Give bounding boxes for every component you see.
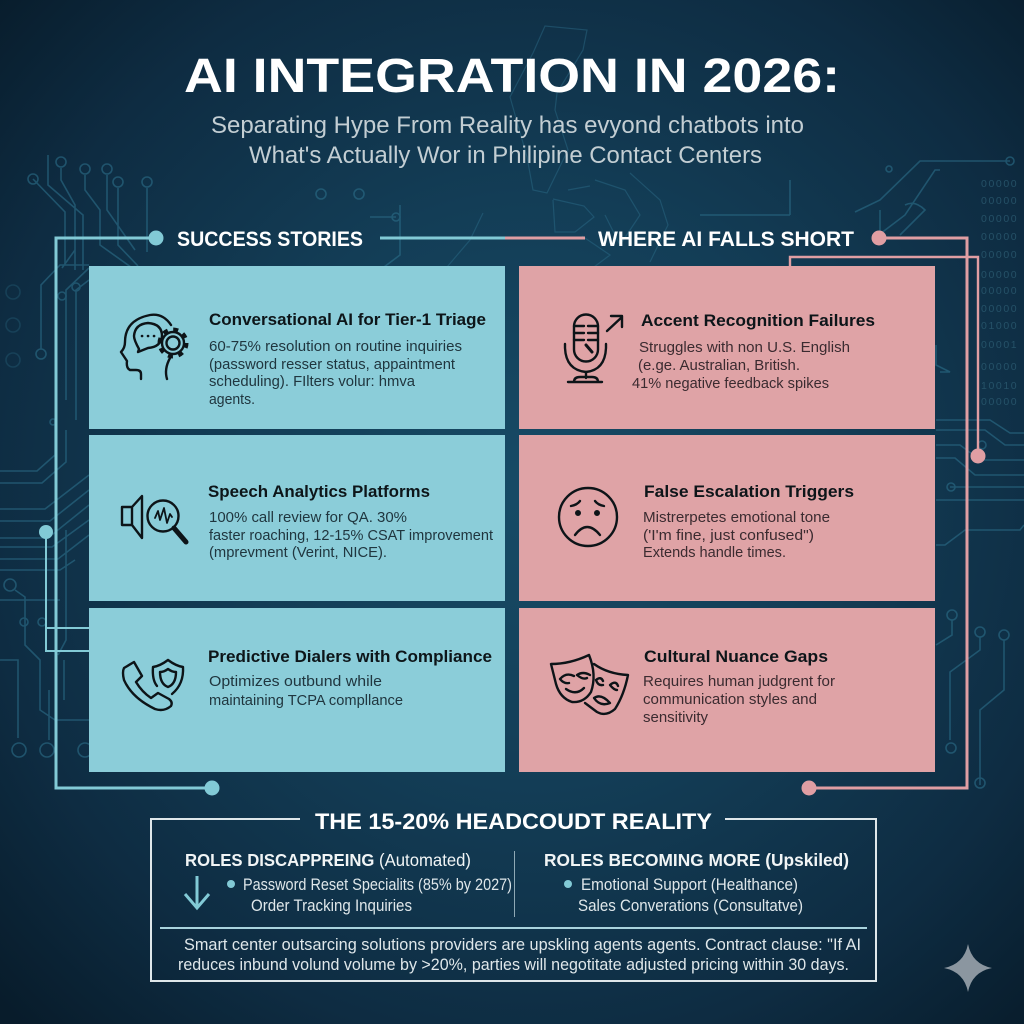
background binary digits	[981, 178, 1018, 408]
background binary digits: 00000	[981, 269, 1018, 281]
heading: False Escalation Triggers	[644, 482, 854, 501]
background binary digits: 00000	[981, 361, 1018, 373]
body text: sensitivity	[643, 710, 709, 726]
body text: (mprevment (Verint, NICE).	[209, 545, 387, 561]
contract clause note: Smart center outsarcing solutions providers are upskling agents agents. Contract clause: "If AI	[184, 936, 861, 954]
background binary digits: 00000	[981, 213, 1018, 225]
background binary digits: 10010	[981, 380, 1018, 392]
panel: speech analytics	[89, 435, 505, 601]
disappearing roles list: Password Reset Specialits (85% by 2027)	[243, 876, 512, 894]
heading: success stories: SUCCESS STORIES	[177, 228, 363, 251]
body text	[643, 510, 830, 561]
heading: Cultural Nuance Gaps	[644, 647, 828, 666]
connector node: teal bottom	[204, 780, 220, 796]
disappearing roles list: Order Tracking Inquiries	[251, 897, 412, 915]
background binary digits: 00000	[981, 195, 1018, 207]
body text: 60-75% resolution on routine inquiries	[209, 339, 462, 355]
background binary digits: 00000	[981, 285, 1018, 297]
icon: microphone with arrow	[565, 314, 622, 382]
heading: Accent Recognition Failures	[641, 311, 875, 330]
upskilled roles list	[578, 876, 803, 915]
background binary digits: 00000	[981, 249, 1018, 261]
body text: agents.	[209, 392, 255, 408]
upskilled roles list: Sales Converations (Consultatve)	[578, 897, 803, 915]
connector node: pink bottom	[802, 780, 816, 796]
body text	[209, 510, 493, 561]
subtitle	[211, 112, 804, 169]
icon: worried face	[559, 488, 617, 546]
panel: cultural nuance	[519, 608, 935, 772]
connector: success stories frame	[46, 238, 505, 788]
panel: predictive dialers	[89, 608, 505, 772]
body text: scheduling). FIlters volur: hmva	[209, 374, 416, 390]
connector node: teal top	[148, 230, 164, 246]
connector node: pink top	[872, 230, 886, 246]
panel: conversational AI	[89, 266, 505, 429]
icon: head with speech bubble and gear	[121, 315, 186, 379]
body text	[643, 674, 835, 726]
body text: maintaining TCPA compllance	[209, 693, 403, 709]
body text: (password resser status, appaintment	[209, 357, 455, 373]
heading: Predictive Dialers with Compliance	[208, 647, 492, 666]
background binary digits: 00000	[981, 178, 1018, 190]
body text: Requires human judgrent for	[643, 674, 835, 690]
body text: Struggles with non U.S. English	[639, 340, 850, 356]
body text: faster roaching, 12-15% CSAT improvement	[209, 528, 493, 544]
body text	[209, 674, 403, 709]
subtitle: What's Actually Wor in Philipine Contact Centers	[249, 142, 762, 169]
panel: accent recognition	[519, 266, 935, 429]
background binary digits: 00001	[981, 339, 1018, 351]
background circuit traces	[0, 155, 1024, 788]
roles disappearing heading: ROLES DISCAPPREING (Automated)	[185, 850, 471, 870]
body text: (e.ge. Australian, British.	[638, 358, 800, 374]
background binary digits: 01000	[981, 320, 1018, 332]
icon: theatre masks	[551, 655, 628, 714]
icon: down arrow	[185, 876, 209, 908]
panel frame	[151, 819, 876, 981]
icon: phone and shield	[123, 660, 183, 710]
icon: speaker and magnifier with waveform	[122, 496, 186, 542]
title: AI INTEGRATION IN 2026:	[184, 50, 840, 103]
heading: THE 15-20% HEADCOUDT REALITY	[315, 809, 712, 834]
body text: communication styles and	[643, 692, 817, 708]
contract clause note: reduces inbund volund volume by >20%, parties will negotitate adjusted pricing within 30 days.	[178, 956, 849, 974]
body text: Mistrerpetes emotional tone	[643, 510, 830, 526]
panel: headcount reality	[151, 809, 876, 981]
body text: Optimizes outbund while	[209, 674, 382, 690]
icon: sparkle watermark	[944, 944, 992, 992]
body text	[209, 339, 462, 408]
roles becoming more heading: ROLES BECOMING MORE (Upskiled)	[544, 850, 849, 870]
background binary digits: 00000	[981, 303, 1018, 315]
body text: 41% negative feedback spikes	[632, 376, 829, 392]
heading: Speech Analytics Platforms	[208, 482, 430, 501]
upskilled roles list: Emotional Support (Healthance)	[581, 876, 798, 894]
connector: shortfalls frame	[505, 238, 978, 788]
heading: where AI falls short: WHERE AI FALLS SHORT	[598, 228, 854, 251]
connector node: pink right	[970, 448, 986, 464]
body text: ('I'm fine, just confused")	[643, 528, 814, 544]
bullet	[564, 880, 572, 888]
subtitle: Separating Hype From Reality has evyond chatbots into	[211, 112, 804, 139]
background binary digits: 00000	[981, 231, 1018, 243]
disappearing roles list	[243, 876, 512, 915]
panel: false escalation	[519, 435, 935, 601]
background map of the Philippines	[447, 26, 668, 270]
body text: Extends handle times.	[643, 545, 786, 561]
connector node: teal left	[39, 525, 53, 539]
body text: 100% call review for QA. 30%	[209, 510, 407, 526]
contract clause note	[178, 936, 861, 974]
bullet	[227, 880, 235, 888]
body text	[632, 340, 850, 392]
background binary digits: 00000	[981, 396, 1018, 408]
heading: Conversational AI for Tier-1 Triage	[209, 310, 486, 329]
